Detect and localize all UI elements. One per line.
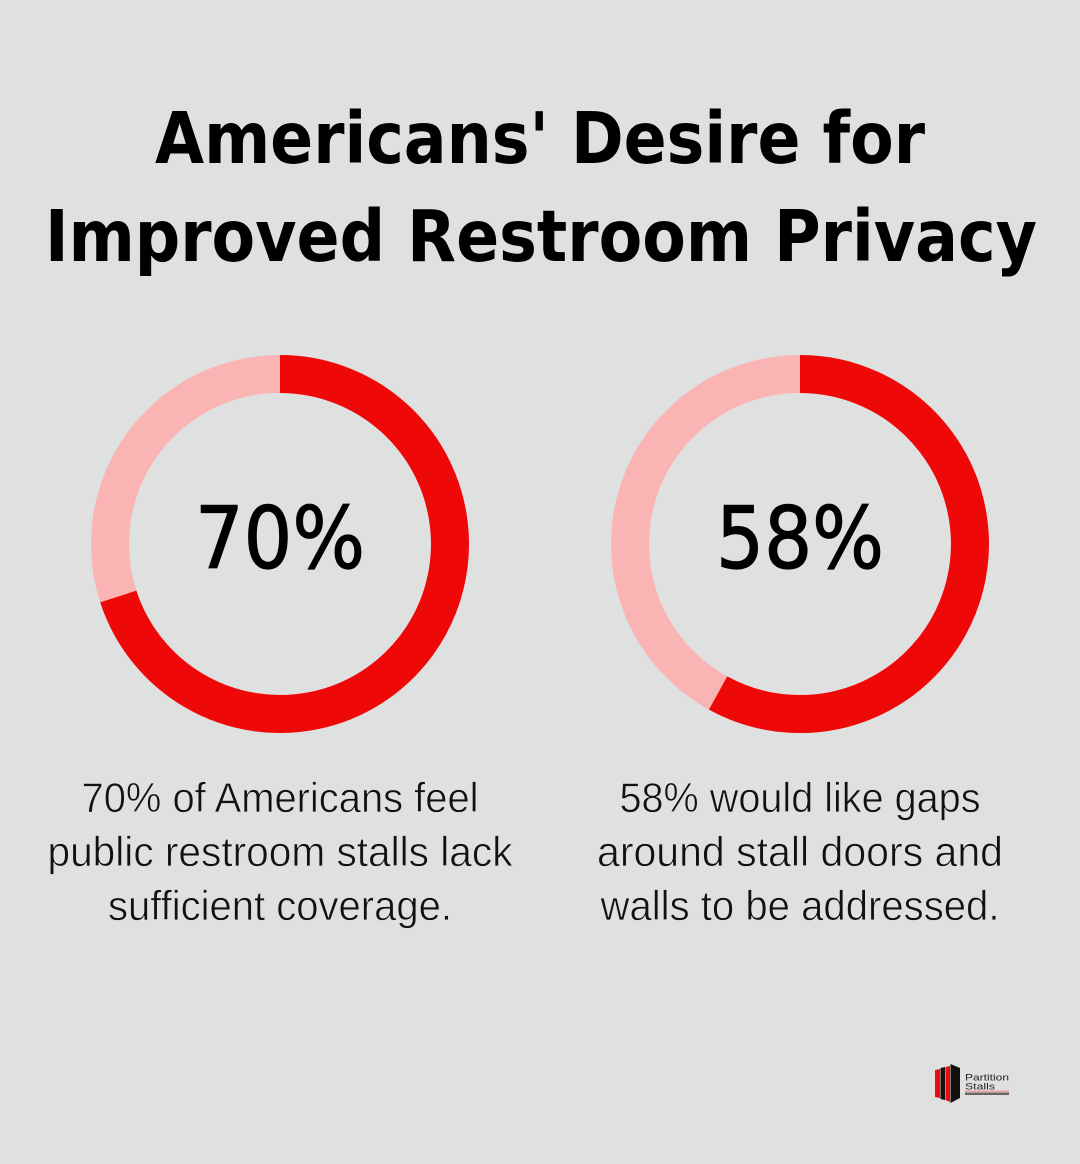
donut chart: 58%	[630, 374, 970, 714]
caption: 58%	[597, 774, 1003, 929]
logo wordmark	[965, 1072, 1009, 1095]
icon: partition panels	[935, 1064, 960, 1103]
caption: 70%: sufficient coverage.	[108, 882, 452, 929]
logo wordmark: Partition	[965, 1072, 1009, 1084]
donut chart: 70%	[110, 374, 450, 714]
caption: 58%: 58% would like gaps	[620, 774, 980, 821]
title	[45, 97, 1037, 278]
caption: 70%: 70% of Americans feel	[82, 774, 478, 821]
donut chart: 70%: 70%	[195, 489, 365, 589]
logo wordmark: Stalls	[965, 1082, 995, 1092]
caption: 58%: around stall doors and	[597, 828, 1003, 875]
caption: 70%: public restroom stalls lack	[48, 828, 513, 875]
logo: Partition Stalls	[935, 1064, 1009, 1103]
donut chart: 58%: 58%	[716, 489, 884, 589]
caption: 70%	[48, 774, 513, 929]
caption: 58%: walls to be addressed.	[600, 882, 1000, 929]
title: Americans' Desire for	[155, 97, 925, 180]
